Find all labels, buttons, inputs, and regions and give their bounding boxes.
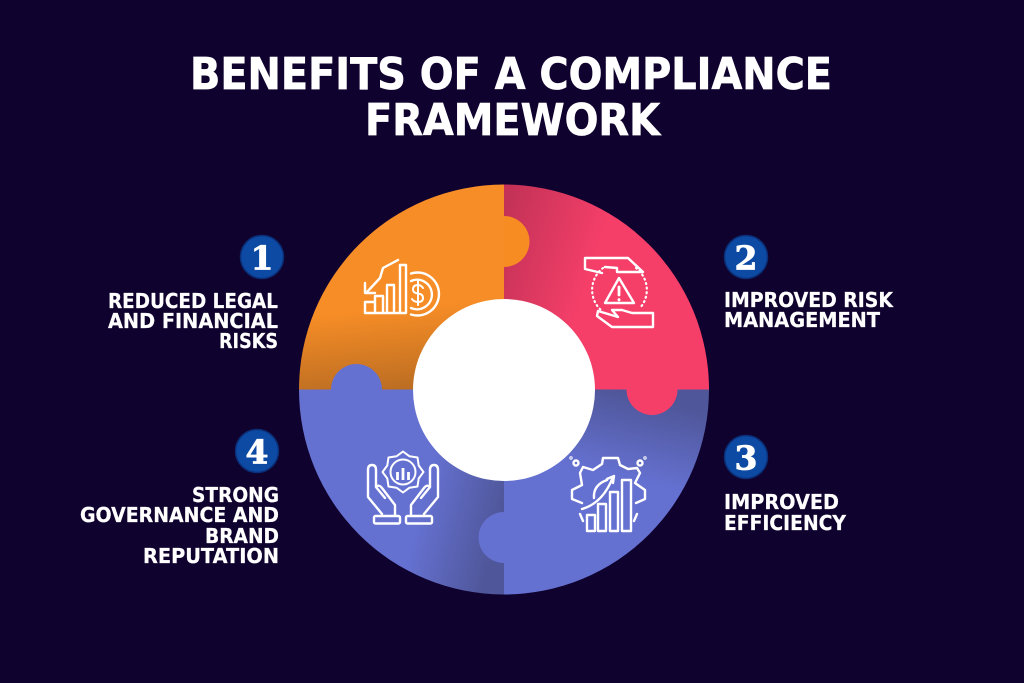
panel: orange piece — [299, 184, 504, 390]
icon: falling bars and coin — [365, 260, 439, 316]
icon: gear with growth bars — [570, 458, 646, 531]
icon: hands with warning — [585, 258, 653, 327]
badge 2 — [724, 236, 768, 278]
label 4: strong governance and brand reputation: GOVERNANCE AND — [80, 503, 279, 527]
label 3: improved efficiency: IMPROVED — [724, 490, 839, 514]
label 1: reduced legal and financial risks: AND FINANCIAL — [108, 309, 278, 333]
label 1: reduced legal and financial risks: RISKS — [219, 329, 278, 353]
label 2: improved risk management — [724, 288, 894, 332]
label 4: strong governance and brand reputation: REPUTATION — [143, 544, 279, 568]
title — [190, 49, 832, 146]
label 3: improved efficiency — [724, 490, 847, 535]
label 3: improved efficiency: EFFICIENCY — [724, 511, 847, 535]
badge 4 — [236, 430, 278, 472]
badge 3: 3 — [735, 438, 757, 478]
label 2: improved risk management: IMPROVED RISK — [724, 288, 894, 312]
label 4: strong governance and brand reputation — [80, 483, 279, 568]
label 1: reduced legal and financial risks — [108, 289, 278, 353]
label 4: strong governance and brand reputation: BRAND — [205, 524, 279, 548]
badge 1 — [240, 236, 284, 278]
puzzle tab: blue 4 — [331, 364, 382, 390]
badge 3 — [724, 436, 768, 478]
badge 1: 1 — [251, 238, 273, 278]
panel: blue piece 3 — [504, 390, 709, 594]
panel: blue piece 4 — [299, 390, 504, 594]
title: FRAMEWORK — [365, 95, 662, 146]
label 4: strong governance and brand reputation: STRONG — [192, 483, 279, 507]
panel: pink piece — [504, 184, 709, 390]
label 1: reduced legal and financial risks: REDUCED LEGAL — [108, 289, 278, 313]
badge 4: 4 — [246, 432, 268, 472]
puzzle tab: pink — [626, 390, 678, 415]
icon: hands holding gear — [368, 452, 438, 524]
badge 2: 2 — [735, 238, 757, 278]
label 2: improved risk management: MANAGEMENT — [724, 308, 880, 332]
title: BENEFITS OF A COMPLIANCE — [190, 49, 832, 100]
puzzle tab: blue 3 — [478, 512, 504, 563]
centre circle — [413, 299, 595, 481]
puzzle tab: orange — [504, 216, 530, 267]
puzzle ring — [299, 184, 709, 594]
